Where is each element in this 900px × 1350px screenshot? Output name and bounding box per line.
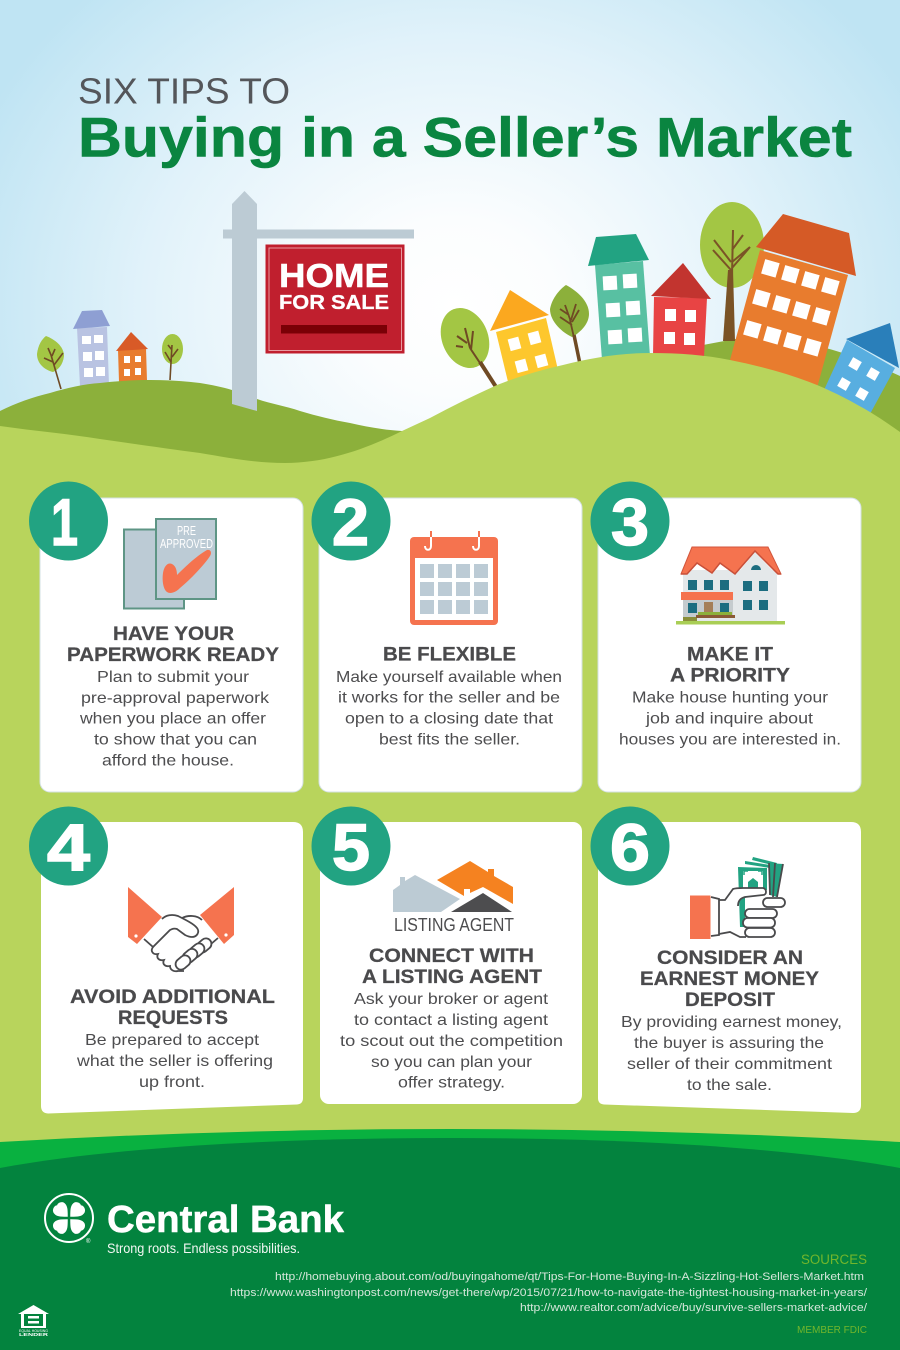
heading: REQUESTS — [118, 1007, 228, 1029]
sources: MEMBER FDIC — [797, 1325, 867, 1336]
heading: CONNECT WITH — [369, 945, 534, 967]
title: Buying in a Seller’s Market — [78, 106, 852, 168]
card 4 — [41, 822, 303, 1114]
light green hills and ground — [0, 353, 900, 1180]
heading — [70, 986, 275, 1029]
body text: By providing earnest money, — [621, 1014, 842, 1031]
sky background — [0, 0, 900, 480]
number badge 1: 1 — [51, 485, 78, 559]
body text: Make house hunting your — [632, 690, 829, 706]
logo: Central Bank — [45, 1194, 345, 1256]
body text — [340, 991, 563, 1092]
number badge 5: 5 — [332, 810, 370, 884]
heading: EARNEST MONEY — [640, 968, 819, 990]
heading — [362, 945, 542, 988]
body text: seller of their commitment — [627, 1056, 833, 1073]
number badge 2 — [312, 482, 390, 560]
heading: A LISTING AGENT — [362, 966, 542, 988]
icon: pre-approved papers: APPROVED — [160, 536, 213, 551]
icon: equal housing lender — [18, 1305, 49, 1337]
heading: MAKE IT — [687, 644, 773, 666]
heading: AVOID ADDITIONAL — [70, 986, 275, 1008]
heading: BE FLEXIBLE — [383, 644, 516, 666]
sources: http://homebuying.about.com/od/buyingahome/qt/Tips-For-Home-Buying-In-A-Sizzling-Hot-Sellers-Market.htm — [275, 1271, 864, 1283]
icon: handshake — [128, 887, 234, 972]
body text: pre-approval paperwork — [81, 690, 270, 707]
body text: up front. — [139, 1074, 205, 1091]
body text: job and inquire about — [645, 710, 814, 728]
icon: pre-approved papers: PRE — [177, 523, 196, 538]
body text: to scout out the competition — [340, 1033, 563, 1050]
body text: what the seller is offering — [76, 1053, 273, 1070]
left neighbourhood houses and trees — [37, 310, 183, 389]
number badge 3 — [590, 482, 670, 560]
logo: Central Bank: Central Bank — [107, 1199, 345, 1241]
heading: PAPERWORK READY — [67, 644, 279, 666]
body text: best fits the seller. — [379, 732, 520, 748]
number badge 2: 2 — [332, 485, 369, 559]
body text: houses you are interested in. — [619, 732, 841, 748]
body text: Be prepared to accept — [85, 1032, 260, 1049]
logo: Central Bank: ® — [86, 1238, 91, 1245]
body text: it works for the seller and be — [338, 690, 560, 706]
heading: DEPOSIT — [685, 989, 775, 1011]
body text — [621, 1014, 842, 1094]
card 3 — [598, 498, 861, 792]
icon: listing agent houses: LISTING AGENT — [394, 915, 514, 935]
sources — [230, 1252, 868, 1336]
body text: Ask your broker or agent — [354, 991, 549, 1008]
logo: Central Bank: Strong roots. Endless possibilities. — [107, 1240, 300, 1256]
footer band — [0, 1129, 900, 1350]
sources: SOURCES — [801, 1252, 867, 1267]
tree: leaning oval — [432, 301, 498, 390]
number badge 6 — [590, 806, 670, 886]
body text — [336, 669, 562, 748]
body text — [76, 1032, 273, 1091]
icon: calendar — [410, 531, 498, 625]
body text: afford the house. — [102, 752, 234, 770]
for sale sign: FOR SALE — [279, 292, 389, 314]
heading — [67, 623, 279, 666]
heading: HAVE YOUR — [113, 623, 234, 645]
body text — [79, 669, 270, 770]
body text: to the sale. — [687, 1077, 772, 1094]
house: big orange — [730, 214, 856, 388]
icon: pre-approved papers — [124, 519, 216, 608]
body text: when you place an offer — [79, 710, 267, 728]
body text: Plan to submit your — [97, 669, 250, 686]
card 6 — [598, 822, 861, 1113]
house: red — [651, 263, 711, 357]
icon: listing agent houses — [393, 861, 514, 935]
icon: equal housing lender: LENDER — [19, 1332, 49, 1337]
body text: Make yourself available when — [336, 669, 562, 686]
house: teal — [588, 234, 650, 360]
for sale sign: HOME — [279, 258, 389, 295]
icon: large house — [676, 547, 785, 624]
card 2 — [319, 498, 582, 792]
dark green hill right — [690, 339, 900, 440]
body text: so you can plan your — [371, 1054, 533, 1071]
number badge 1 — [29, 482, 108, 560]
number badge 5 — [312, 806, 390, 886]
number badge 4 — [29, 806, 108, 886]
right neighbourhood houses and trees — [432, 202, 899, 414]
number badge 6: 6 — [610, 810, 650, 884]
heading — [640, 947, 819, 1011]
card 5 — [320, 822, 582, 1104]
sources: http://www.realtor.com/advice/buy/survive-sellers-market-advice/ — [520, 1302, 868, 1314]
body text: to contact a listing agent — [354, 1012, 549, 1029]
sources: https://www.washingtonpost.com/news/get-there/wp/2015/07/21/how-to-navigate-the-tightest-housing-market-in-years/ — [230, 1287, 868, 1299]
body text: to show that you can — [94, 732, 257, 748]
tree: large — [700, 202, 764, 341]
body text: the buyer is assuring the — [634, 1035, 824, 1052]
for sale sign — [223, 191, 414, 411]
heading — [670, 644, 790, 686]
icon: hand holding money — [690, 857, 785, 939]
heading: A PRIORITY — [670, 664, 790, 686]
title: SIX TIPS TO — [78, 70, 290, 112]
body text — [619, 690, 841, 748]
dark green hill left — [0, 380, 420, 500]
title — [78, 70, 852, 168]
house: yellow — [490, 290, 558, 386]
body text: open to a closing date that — [345, 710, 554, 728]
number badge 4: 4 — [47, 810, 90, 884]
icon: equal housing lender: EQUAL HOUSING — [19, 1329, 48, 1333]
body text: offer strategy. — [398, 1074, 505, 1092]
heading: CONSIDER AN — [657, 947, 803, 969]
tree: small leaf — [550, 285, 589, 364]
card 1 — [40, 498, 303, 792]
number badge 3: 3 — [611, 485, 649, 559]
house: blue — [824, 323, 899, 414]
